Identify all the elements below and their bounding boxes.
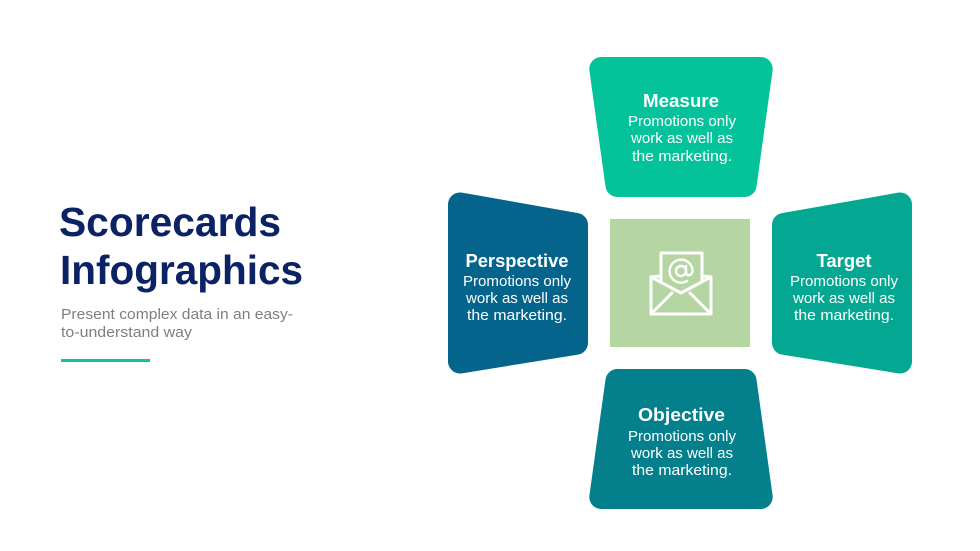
panel: objective: Promotions only	[628, 428, 736, 445]
subtitle text: Present complex data in an easy-	[61, 306, 293, 323]
panel: measure: work as well as	[630, 130, 733, 147]
panel: target: the marketing.	[794, 307, 894, 324]
panel: measure: the marketing.	[632, 148, 732, 165]
panel: perspective	[460, 204, 576, 362]
accent underline	[61, 359, 150, 362]
title	[59, 199, 303, 293]
panel: objective: Objective	[638, 405, 725, 425]
panel: perspective: Perspective	[466, 251, 568, 271]
panel: target: Target	[816, 251, 872, 271]
panel: perspective: Promotions only	[463, 273, 571, 290]
panel: objective: the marketing.	[632, 462, 732, 479]
panel: measure	[601, 69, 761, 185]
panel: target: work as well as	[792, 290, 895, 307]
icon: open envelope with at sign	[651, 253, 711, 314]
panel: measure: Promotions only	[628, 113, 736, 130]
panel: objective: work as well as	[630, 445, 733, 462]
title: Infographics	[60, 247, 303, 293]
panel: perspective: work as well as	[465, 290, 568, 307]
panel: target: Promotions only	[790, 273, 898, 290]
title: Scorecards	[59, 199, 281, 245]
subtitle text: to-understand way	[61, 324, 193, 341]
panel: measure: Measure	[643, 91, 719, 111]
center panel	[610, 219, 750, 347]
subtitle text	[61, 306, 293, 341]
panel: perspective: the marketing.	[467, 307, 567, 324]
panel: target	[784, 204, 900, 362]
panel: objective	[601, 381, 761, 497]
